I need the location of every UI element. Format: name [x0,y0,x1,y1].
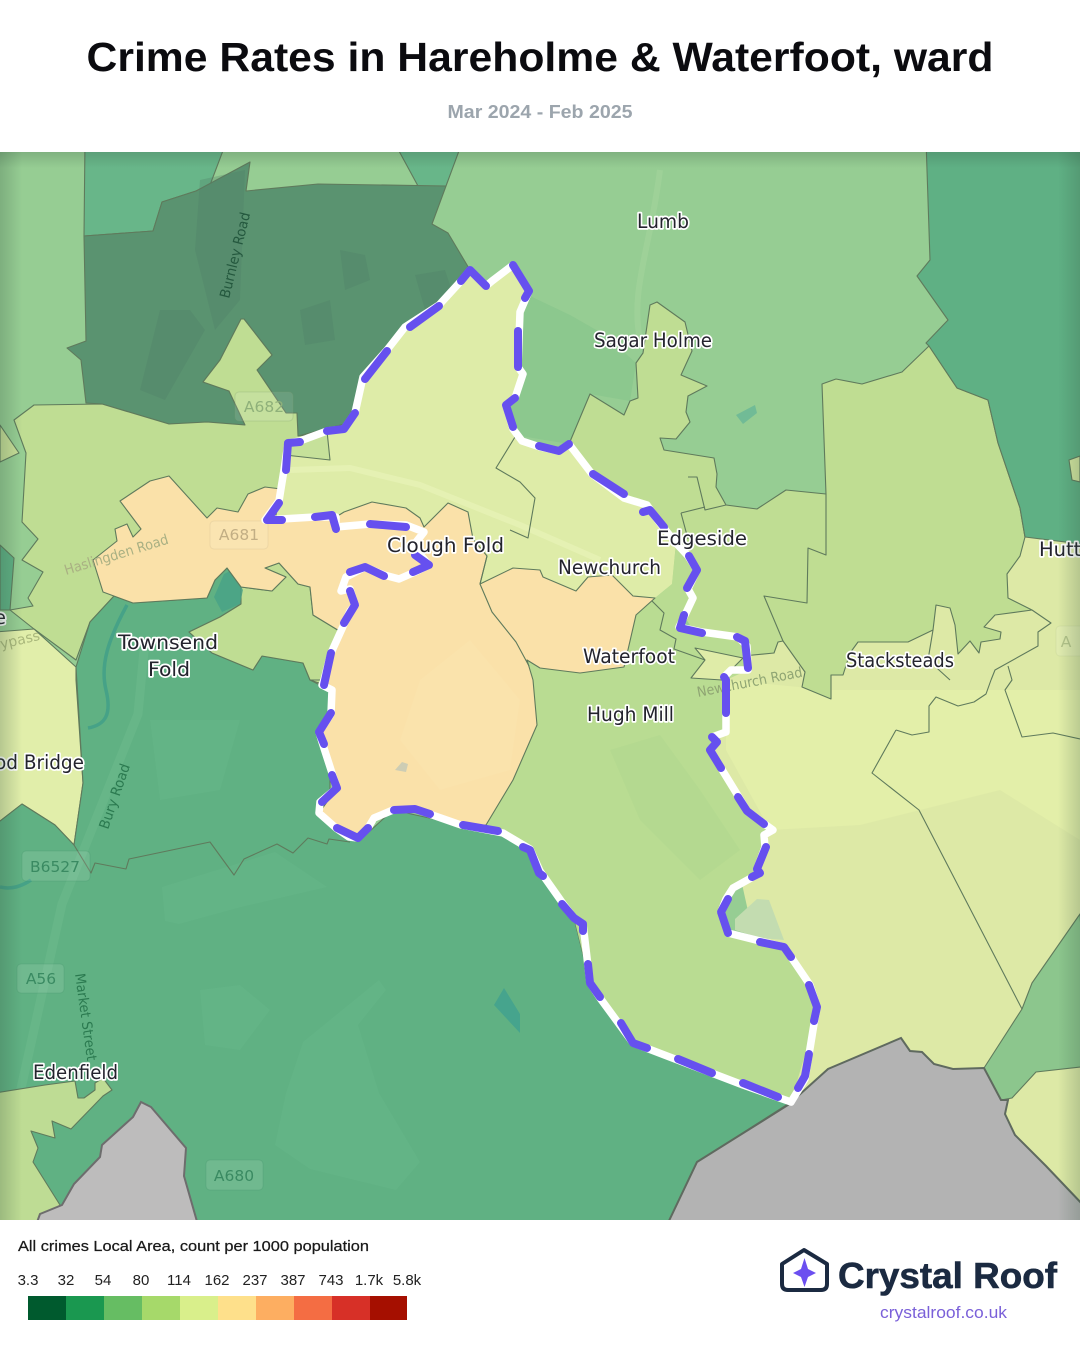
shield: A680: A680 [214,1167,254,1185]
region: north teal wedge [399,152,459,186]
region: ward south pale patch [735,899,784,940]
south green shading [150,720,420,1190]
region: ward south lime [486,543,817,1102]
label: Townsend Fold [117,631,218,681]
label: Clough Fold: Clough Fold [387,534,504,557]
region: east lime block [764,346,1032,699]
region: east edge patch [1069,456,1080,482]
label: Waterfoot: Waterfoot [583,645,675,668]
icon: house with star [782,1250,827,1290]
logo wordmark: Crystal Roof [838,1255,1058,1296]
lake: Lumb [736,405,757,424]
region: east side yellow base [715,538,1080,1200]
legend values [18,1272,422,1289]
region: north-west teal [83,152,223,236]
small grey patch [395,762,408,772]
legend title: All crimes Local Area, count per 1000 population [18,1238,369,1255]
legend values: 80 [133,1272,149,1289]
region: far-left pieces [0,425,19,462]
region: West yellow [0,629,83,845]
region: far-east dark green [917,140,1080,545]
legend values: 387 [280,1272,306,1289]
map edge vignette [0,152,1080,1220]
ward north dividers [496,437,535,538]
region: far-left dark piece [0,545,14,610]
shield: B6527: B6527 [30,858,80,876]
label: Townsend Fold: Townsend [117,631,218,654]
legend values: 5.8k [393,1272,422,1289]
legend [18,1238,422,1320]
subtitle: date range: Mar 2024 - Feb 2025 [448,101,632,122]
shield: B6527 [22,851,90,881]
region: townsend lime [189,563,341,680]
title: Crime Rates in Hareholme & Waterfoot, ward [86,34,994,80]
shield: A682 [235,392,293,421]
inner dividers: east [872,610,1080,1009]
region: Lumb west shade [506,296,636,444]
ward outline: purple dashes [267,265,817,1097]
label: Stacksteads: Stacksteads [846,649,954,672]
region: Sagar Holme spur [569,302,826,656]
ward boundary [265,265,817,1102]
region: south-east green patch [984,914,1080,1100]
region: west lime area [10,319,340,690]
label: Sagar Holme: Sagar Holme [594,329,712,352]
ward outline: white [265,265,817,1102]
region: Edenfield lime [0,1078,112,1225]
shield: A681: A681 [219,526,259,544]
teal band: orange edge [214,570,243,612]
logo url: crystalroof.co.uk [880,1304,1008,1322]
region: spur lime in ward [291,435,330,460]
region: south large green [0,568,791,1225]
label: Townsend Fold: Fold [148,658,190,681]
legend values: 237 [242,1272,268,1289]
road name: Burnley Road: Burnley Road [217,211,254,300]
label: Newchurch: Newchurch [558,556,661,579]
label: Lumb: Lumb [637,210,689,233]
region: Burnley Road dark area [67,162,470,436]
orange divider [480,556,529,666]
road name: Haslingden Road: Haslingden Road [62,532,170,579]
dark area shading [200,174,226,188]
road name: Newchurch Road: Newchurch Road [696,665,804,701]
legend values: 162 [204,1272,230,1289]
shield: A682: A682 [244,398,284,416]
shield: A edge: A [1061,633,1072,651]
legend values: 1.7k [355,1272,384,1289]
lower-east strip patch [691,648,743,680]
label: Edgeside: Edgeside [657,527,747,550]
region: grey no-data south-west [36,1102,198,1225]
shield: A edge [1056,626,1080,656]
label: Hugh Mill: Hugh Mill [587,703,674,726]
road name: Market Street: Market Street [71,972,99,1062]
legend values: 32 [58,1272,74,1289]
yellow band lighter [726,680,1080,840]
road labels [0,211,1080,1190]
divider: south wards line [74,838,350,875]
road: Bacup Road light [290,468,600,560]
motorway band [20,640,145,1093]
region: grey no-data south-east [667,1038,1080,1225]
legend values: 114 [167,1272,191,1289]
region: orange high-crime area [93,476,655,838]
lake: south [494,988,520,1033]
shield: A680 [206,1160,263,1190]
label: Edenfield: Edenfield [33,1061,118,1084]
edgeside dividers [673,477,783,656]
waterfoot dividers [652,601,705,660]
spur border [569,302,826,509]
legend colour scale [28,1296,407,1320]
road name: Bury Road: Bury Road [97,762,134,831]
orange area shading [400,640,520,790]
legend values: 54 [95,1272,111,1289]
legend values: 3.3 [18,1272,38,1289]
legend values: 743 [318,1272,344,1289]
logo [782,1250,1058,1322]
region: ward north yellow [265,265,676,598]
place labels [0,210,1080,1084]
ward south shading [610,735,740,880]
valley road lighter [637,170,660,340]
shield: A681 [210,521,268,549]
rivers: Townsend [0,605,127,888]
shield: A56 [17,964,64,993]
shield: A56: A56 [26,970,56,988]
